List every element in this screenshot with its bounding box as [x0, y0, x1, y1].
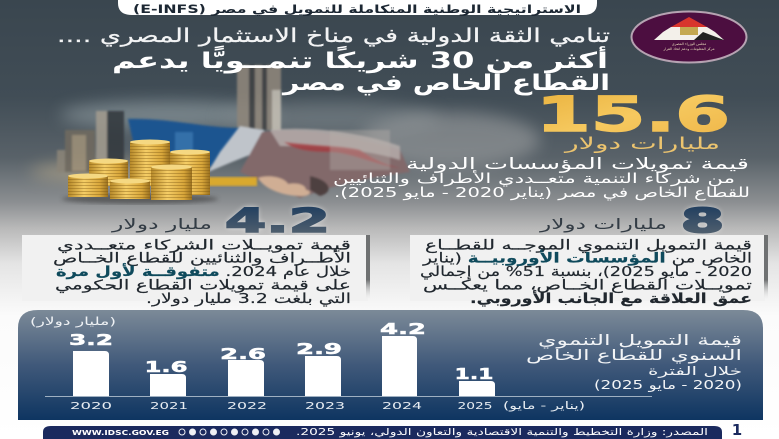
flag triangle	[654, 17, 724, 40]
chart title: قيمة التمويل التنموي	[538, 333, 742, 349]
stat 8 billion: مليارات دولار	[538, 217, 667, 233]
chart title: (2020 - مايو 2025)	[594, 378, 742, 393]
bar 2025: 2025	[458, 401, 492, 412]
logo	[632, 12, 746, 62]
source text: المصدر: وزارة التخطيط والتنمية الاقتصادية والتعاون الدولي، يونيو 2025.	[296, 427, 708, 438]
bar 2025: (يناير - مايو)	[503, 400, 585, 412]
headline description	[333, 155, 750, 201]
website: WWW.IDSC.GOV.EG	[72, 429, 169, 437]
chart title	[526, 333, 742, 393]
bar 2022: 2022	[227, 401, 267, 412]
bar 2023	[296, 340, 345, 412]
ground strip	[205, 177, 257, 186]
panel: European institutions	[410, 235, 768, 307]
bar 2024: 2024	[382, 401, 422, 412]
bar 2020: 2020	[70, 401, 112, 412]
main title: تنامي الثقة الدولية في مناخ الاستثمار المصري ....	[57, 25, 610, 47]
panel: multilateral and bilateral partners: الأطــراف والثنائيين للقطاع الخــاص	[53, 250, 351, 266]
building: central tower	[237, 65, 281, 132]
coin stacks	[68, 140, 210, 200]
handshake	[208, 126, 410, 198]
buildings: left cluster	[57, 111, 174, 173]
chart title: السنوي للقطاع الخاص	[526, 348, 742, 364]
bar 2021: 2021	[150, 401, 188, 412]
top strategy banner	[118, 0, 597, 17]
main title: أكثر من 30 شريكًا تنمــويًّا يدعم	[112, 45, 608, 74]
bar 2023: 2023	[305, 401, 345, 412]
bar 2020: 3.2	[69, 331, 113, 349]
panel: European institutions: عمق العلاقة مع الجانب الأوروبي.	[470, 290, 752, 307]
page number: 1	[732, 421, 742, 439]
main title: القطاع الخاص في مصر	[282, 71, 610, 96]
headline stat 15.6: 15.6	[536, 87, 730, 143]
stat 8 billion: 8	[681, 201, 724, 240]
headline description: من شركاء التنمية متعــددي الأطراف والثنائيين	[333, 170, 735, 187]
stat 8 billion: 8	[681, 201, 724, 240]
bar chart panel	[18, 310, 763, 420]
stat 4.2 billion: مليار دولار	[110, 217, 212, 233]
bar 2025: 1.1	[454, 365, 494, 383]
bar 2021: 1.6	[144, 358, 188, 376]
panel: multilateral and bilateral partners: التي بلغت 3.2 مليار دولار.	[146, 291, 351, 307]
bar 2024	[380, 320, 426, 412]
logo: مركز المعلومات ودعم اتخاذ القرار	[662, 47, 715, 51]
chart title: خلال الفترة	[648, 364, 742, 379]
headline stat 15.6	[536, 87, 730, 154]
bar 2020	[69, 331, 113, 412]
logo: مجلس الوزراء المصري	[672, 42, 706, 46]
panel: European institutions: تمويــلات القطاع الخــاص، مما يعكــس	[423, 278, 752, 294]
stat 4.2 billion: 4.2	[225, 201, 330, 240]
bar 2022: 2.6	[220, 345, 266, 363]
hero photo: city, handshake and coins	[30, 65, 540, 204]
bar 2023: 2.9	[296, 340, 342, 358]
footer source bar	[43, 426, 722, 439]
headline stat 15.6: مليارات دولار	[563, 134, 720, 154]
coin stack shadow	[62, 194, 218, 204]
stat 4.2 billion: 4.2	[225, 201, 330, 240]
chart unit label: (مليار دولار)	[30, 315, 116, 328]
stat 4.2 billion	[110, 201, 330, 240]
panel: European institutions: 2020 - مايو 2025)، بنسبة 51% من إجمالي	[420, 264, 752, 280]
panel: multilateral and bilateral partners	[22, 235, 370, 307]
panel: European institutions: الخاص من المؤسسات الأوروبيــة (يناير	[422, 250, 752, 266]
top strategy banner: الاستراتيجية الوطنية المتكاملة للتمويل في مصر (E-INFS)	[133, 2, 581, 17]
bar 2025	[454, 365, 585, 412]
bar 2021	[144, 358, 188, 412]
panel: multilateral and bilateral partners: خلال عام 2024. متفوقــة لأول مرة	[56, 263, 351, 280]
main title	[57, 25, 610, 96]
social icons	[179, 429, 280, 435]
blue sleeve	[128, 119, 240, 169]
panel: multilateral and bilateral partners: قيمة تمويــلات الشركاء متعــددي	[57, 238, 351, 254]
bar 2024: 4.2	[380, 320, 426, 338]
headline description: قيمة تمويلات المؤسسات الدولية	[406, 155, 749, 174]
panel: European institutions: قيمة التمويل التنموي الموجــه للقطــاع	[425, 238, 752, 254]
bar 2022	[220, 345, 267, 412]
panel: multilateral and bilateral partners: على قيمة تمويلات القطاع الحكومي	[55, 278, 351, 294]
stat 8 billion	[538, 201, 724, 240]
chart axis	[45, 396, 652, 397]
headline description: للقطاع الخاص في مصر (يناير 2020 - مايو 2025).	[334, 185, 750, 201]
